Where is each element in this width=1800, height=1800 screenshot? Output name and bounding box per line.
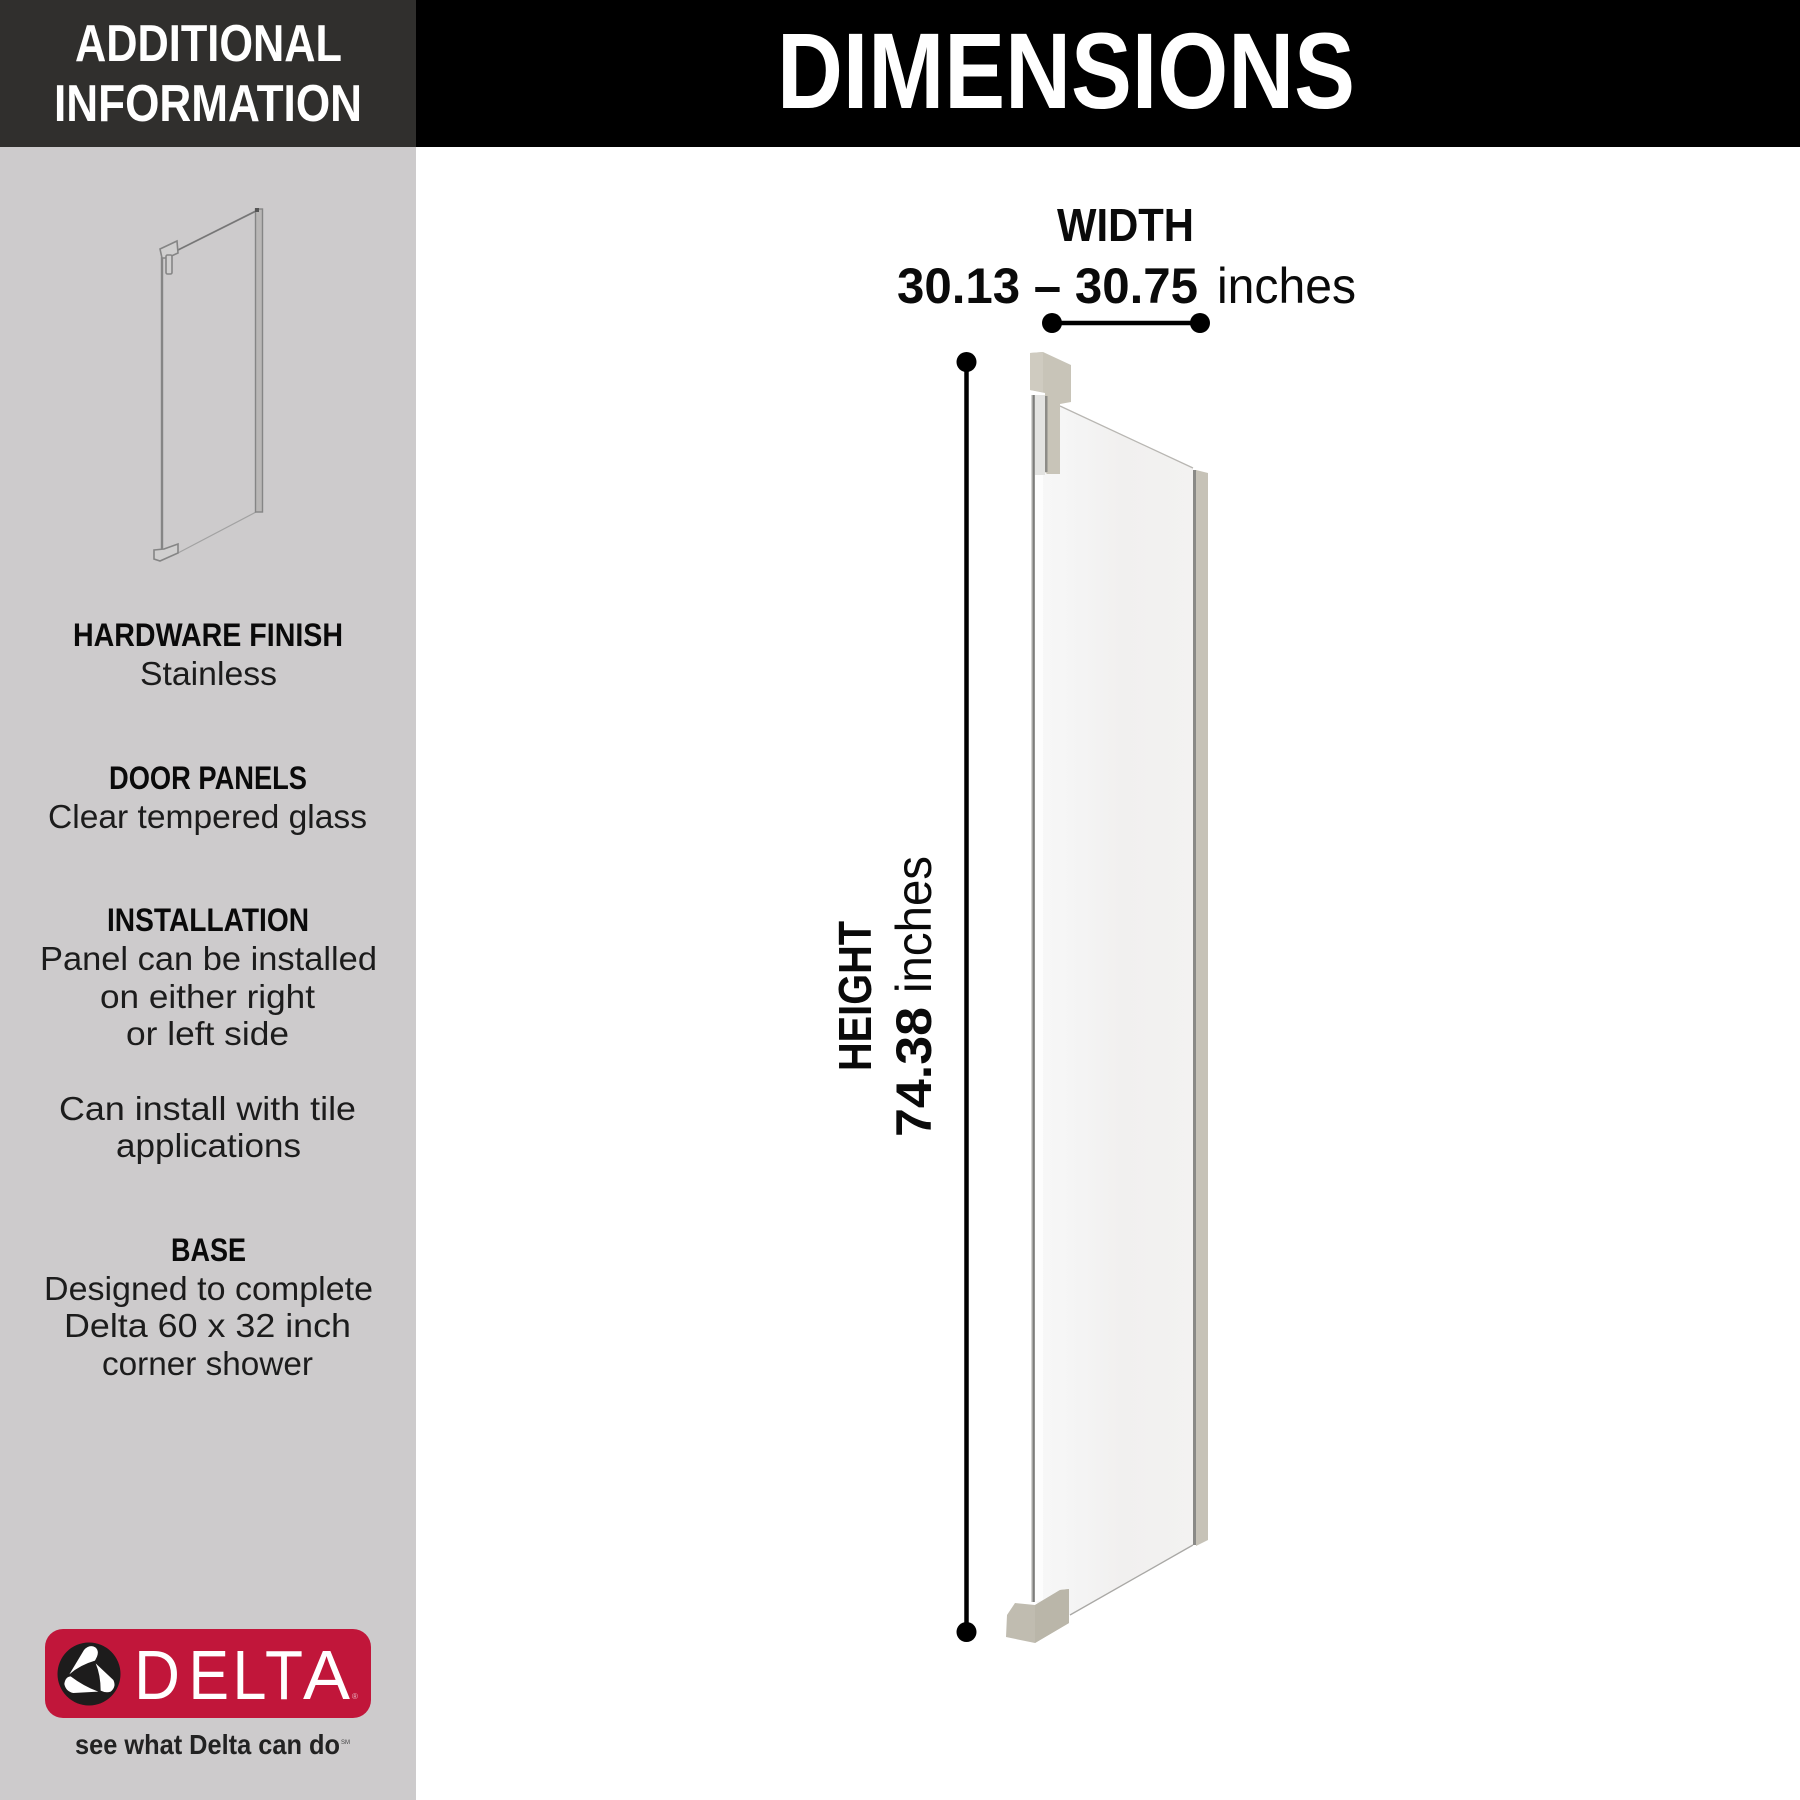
logo: Delta: D — [134, 1636, 180, 1714]
text block: installation: applications — [116, 1128, 301, 1165]
text block: installation: Panel can be installed — [40, 941, 377, 978]
logo: Delta — [45, 1629, 371, 1760]
header: additional information: INFORMATION — [54, 75, 362, 133]
dimension: height: HEIGHT — [829, 921, 881, 1071]
product: glass shower panel — [1006, 352, 1208, 1643]
text block: base — [44, 1232, 373, 1383]
text block: installation: or left side — [126, 1016, 289, 1053]
text block: installation: Can install with tile — [59, 1091, 356, 1128]
dimension: height: 74.38 — [886, 1007, 942, 1137]
text block: installation: on either right — [100, 979, 316, 1016]
right rail — [1193, 470, 1196, 1545]
text block: door panels: Clear tempered glass — [48, 799, 367, 836]
text block: door panels — [48, 760, 367, 836]
header: dimensions title: DIMENSIONS — [777, 10, 1355, 131]
text block: hardware finish: Stainless — [140, 656, 277, 693]
icon: panel line drawing thumbnail — [154, 208, 262, 561]
text block: base: Delta 60 x 32 inch — [64, 1308, 351, 1345]
top bracket — [1030, 352, 1071, 474]
dimension: height: inches — [886, 856, 942, 993]
dimension: width: inches — [1217, 258, 1356, 314]
logo: Delta: see what Delta can do — [75, 1729, 340, 1760]
text block: base: corner shower — [102, 1346, 313, 1383]
text block: hardware finish — [73, 617, 343, 693]
logo: Delta: L — [232, 1636, 266, 1714]
logo: Delta: E — [188, 1636, 229, 1714]
dimension: height — [829, 352, 976, 1642]
text block: base: Designed to complete — [44, 1271, 373, 1308]
text block: installation: INSTALLATION — [107, 902, 309, 938]
dimension: width — [897, 199, 1356, 333]
logo: Delta: SM — [341, 1740, 350, 1746]
logo: Delta: A — [303, 1636, 350, 1714]
text block: hardware finish: HARDWARE FINISH — [73, 617, 343, 653]
logo: Delta: ® — [352, 1692, 358, 1701]
text block: base: BASE — [171, 1232, 246, 1268]
header: additional information — [0, 0, 416, 147]
header: additional information: ADDITIONAL — [75, 15, 342, 73]
logo: Delta: T — [265, 1636, 303, 1714]
bottom bracket — [1006, 1589, 1069, 1643]
dimension: width: 30.13 – 30.75 — [897, 258, 1198, 314]
header: dimensions title — [416, 0, 1800, 147]
text block: installation — [40, 902, 377, 1165]
text block: door panels: DOOR PANELS — [109, 760, 307, 796]
panel: sidebar background — [0, 147, 416, 1800]
dimension: width: WIDTH — [1057, 199, 1194, 251]
glass pane — [1035, 395, 1193, 1615]
